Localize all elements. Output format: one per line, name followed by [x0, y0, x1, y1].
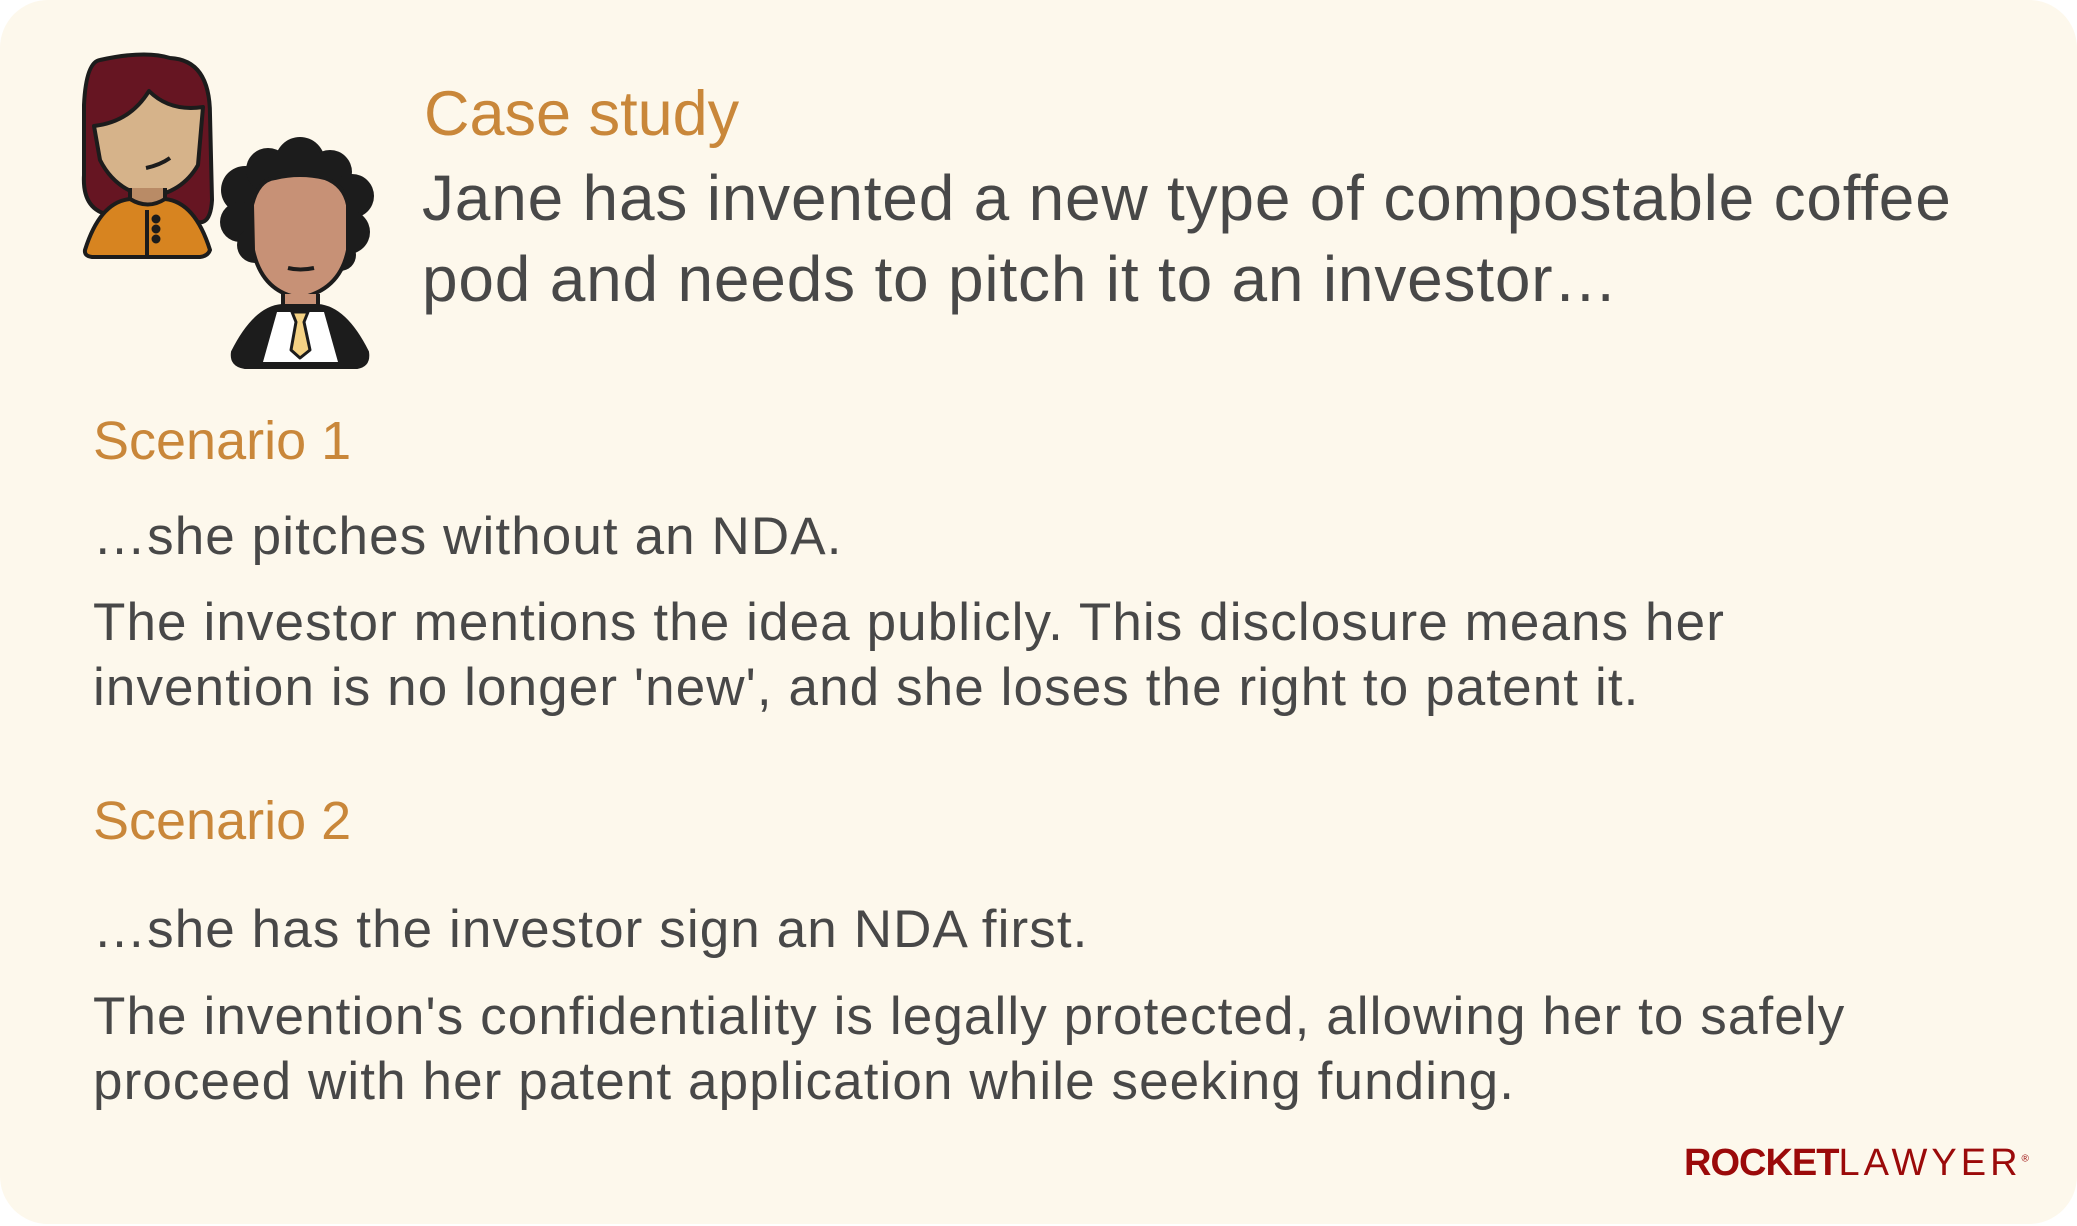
text: scenario 2 body: proceed with her patent application while seeking funding. — [93, 1052, 1515, 1111]
title: Case study: Case study — [424, 79, 739, 149]
text: scenario 2 body — [93, 987, 1845, 1111]
logo: Rocket Lawyer: ROCKETLAWYER® — [1684, 1142, 2030, 1184]
text: scenario 2 lead: …she has the investor sign an NDA first. — [93, 900, 1088, 959]
man — [220, 137, 374, 367]
text: scenario 1 body — [93, 593, 1725, 717]
intro text: Jane has invented a new type of compostable coffee — [422, 162, 1952, 234]
icon: two people — [82, 52, 374, 369]
text: scenario 1 lead: …she pitches without an NDA. — [93, 507, 843, 566]
woman — [84, 54, 212, 257]
text: scenario 1 body: The investor mentions the idea publicly. This disclosure means her — [93, 593, 1725, 652]
intro text: pod and needs to pitch it to an investor… — [422, 243, 1618, 315]
text: scenario 1 body: invention is no longer 'new', and she loses the right to patent it. — [93, 658, 1639, 717]
heading: Scenario 2: Scenario 2 — [93, 791, 351, 851]
heading: Scenario 1: Scenario 1 — [93, 411, 351, 471]
text: scenario 2 body: The invention's confidentiality is legally protected, allowing her to safely — [93, 987, 1845, 1046]
intro text — [422, 162, 1952, 315]
